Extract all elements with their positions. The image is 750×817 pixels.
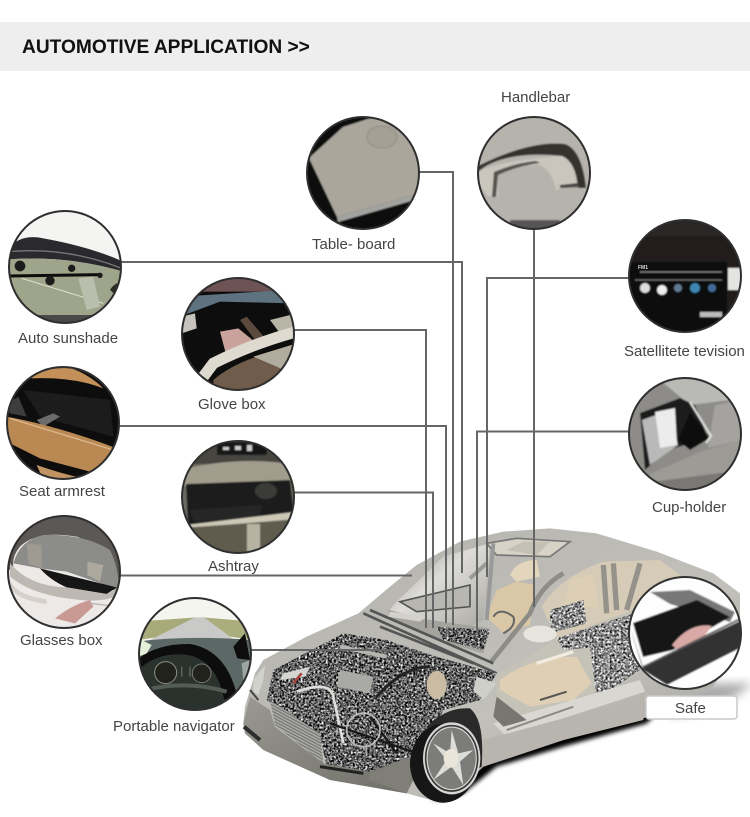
label: satellite television: Satellitete tevision — [624, 343, 745, 360]
label: ashtray: Ashtray — [208, 558, 259, 575]
photo: glasses box — [5, 513, 122, 630]
front seat — [470, 543, 540, 633]
line: portable navigator — [251, 649, 395, 651]
sunroof — [487, 538, 570, 557]
photo: table-board — [305, 115, 425, 231]
label: glove box: Glove box — [198, 396, 266, 413]
photo: cup-holder — [627, 375, 743, 496]
label: seat armrest: Seat armrest — [19, 483, 106, 500]
windshield — [390, 543, 490, 627]
photo: satellite television: FM1 — [638, 265, 648, 271]
label: cup-holder: Cup-holder — [652, 499, 726, 516]
photo: ashtray — [180, 440, 296, 556]
line: seat armrest — [119, 426, 446, 623]
label: auto sunshade: Auto sunshade — [18, 330, 118, 347]
line: handlebar — [533, 229, 535, 607]
ground shadow — [430, 683, 750, 800]
photo: glove box — [180, 277, 297, 393]
line: auto sunshade — [121, 262, 462, 573]
photo: portable navigator — [137, 597, 253, 713]
car cutaway illustration — [243, 528, 750, 803]
photo: seat armrest — [5, 365, 122, 482]
car body silhouette — [243, 528, 740, 803]
front bumper — [243, 697, 417, 793]
label: table-board: Table- board — [312, 236, 395, 253]
title: AUTOMOTIVE APPLICATION >> — [22, 37, 310, 58]
connector lines — [119, 172, 630, 650]
line: glasses box — [120, 574, 412, 576]
sill — [483, 680, 645, 767]
header band — [0, 22, 750, 71]
line: ashtray — [294, 492, 433, 628]
line: satellite television — [487, 278, 630, 577]
engine components — [280, 647, 497, 753]
label box: safe — [646, 696, 737, 719]
photo: handlebar — [476, 115, 592, 232]
side window interior — [542, 560, 680, 638]
headlight — [250, 665, 265, 700]
a-pillar — [490, 573, 563, 663]
grille radiator — [270, 700, 323, 763]
line: cup-holder — [477, 432, 629, 633]
line: table-board — [419, 172, 453, 625]
label: handlebar: Handlebar — [501, 89, 570, 106]
side mirror — [523, 626, 557, 642]
front wheel — [410, 708, 482, 803]
engine bay — [267, 633, 497, 772]
photo: safe — [627, 575, 743, 691]
label box: safe: Safe — [675, 700, 706, 717]
dashboard and cowl — [363, 610, 497, 673]
front seat cushion and lower door — [495, 610, 643, 723]
photo: auto sunshade — [7, 208, 123, 327]
label: glasses box: Glasses box — [20, 632, 103, 649]
photo: satellite television — [627, 218, 743, 334]
label: portable navigator: Portable navigator — [113, 718, 235, 735]
door frame glass panel — [400, 585, 470, 612]
line: glove box — [294, 330, 426, 628]
